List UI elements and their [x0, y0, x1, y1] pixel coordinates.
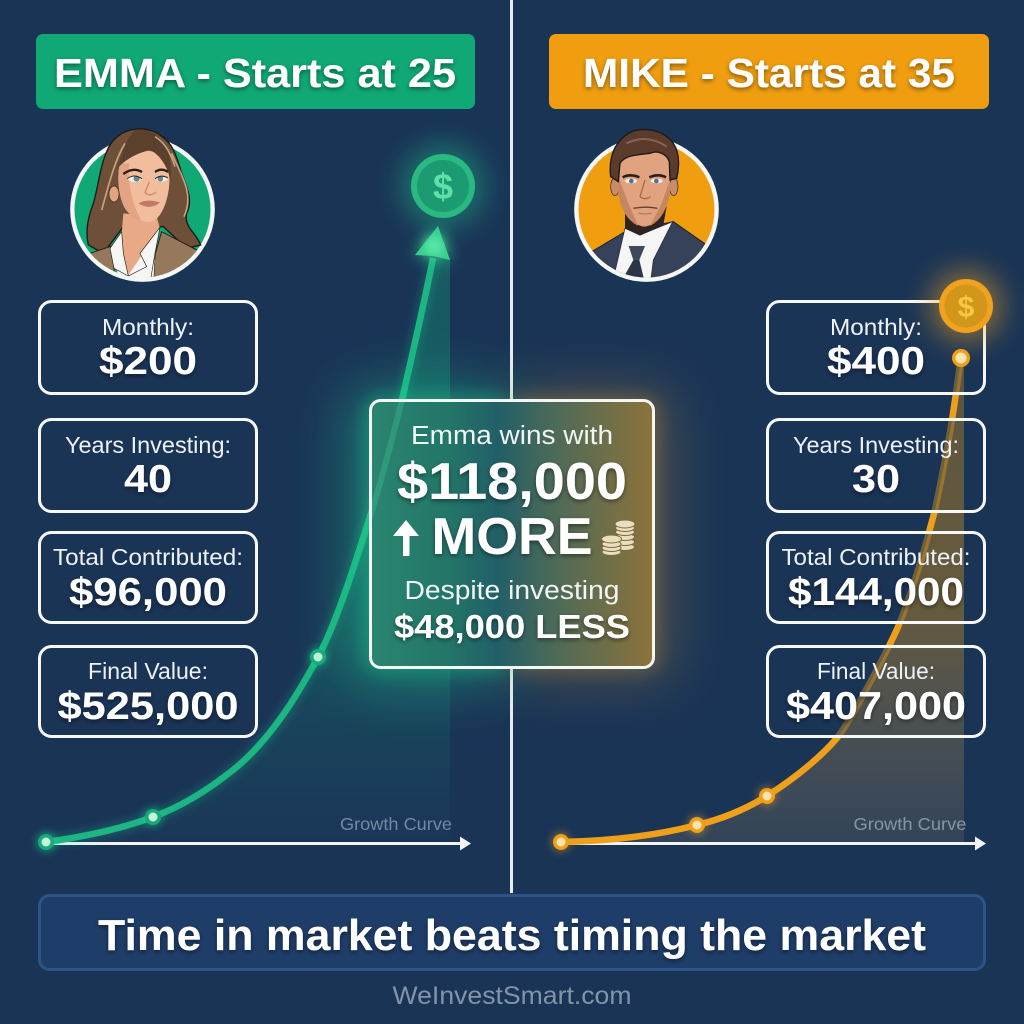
icon: Emma dollar coin	[401, 144, 485, 228]
stat: Mike monthly	[768, 302, 984, 394]
callout: Emma wins	[345, 385, 677, 685]
banner: takeaway: Time in market beats timing the market	[98, 911, 926, 960]
stat: Emma final value: $525,000	[58, 685, 238, 728]
stat: Emma years investing	[40, 420, 256, 512]
stat: Emma final value	[40, 646, 256, 736]
stat: Emma total contributed	[40, 532, 256, 622]
stat: Emma years investing: Years Investing:	[65, 432, 231, 458]
stat: Mike years investing	[768, 420, 984, 512]
callout: Emma wins: MORE	[432, 508, 592, 566]
header: Mike	[549, 34, 989, 109]
marker: Mike curve end point	[952, 349, 970, 367]
stat: Emma final value: Final Value:	[88, 658, 208, 684]
stat: Mike total contributed	[768, 532, 984, 622]
header: Mike: MIKE - Starts at 35	[583, 50, 955, 96]
stat: Mike final value: $407,000	[786, 685, 966, 728]
stat: Mike final value: Final Value:	[817, 658, 935, 684]
stat: Emma monthly: Monthly:	[102, 314, 194, 340]
chart: Emma growth curve	[36, 226, 471, 852]
center divider	[510, 0, 513, 893]
icon: Emma dollar coin: $	[433, 166, 453, 207]
stat: Mike years investing: 30	[852, 458, 900, 501]
stat: Mike total contributed: Total Contributed:	[782, 544, 970, 570]
chart: Emma growth curve: Growth Curve	[340, 814, 452, 834]
callout: Emma wins: $48,000 LESS	[394, 608, 630, 645]
portrait: Emma	[70, 129, 215, 287]
stat: Emma monthly: $200	[99, 340, 197, 383]
stat: Emma years investing: 40	[124, 458, 172, 501]
panels: Mike stats	[768, 302, 984, 736]
header: Emma: EMMA - Starts at 25	[54, 50, 456, 96]
stat: Mike years investing: Years Investing:	[793, 432, 959, 458]
icon: Mike dollar coin: $	[958, 291, 975, 324]
stat: Mike final value	[768, 646, 984, 736]
panels: Emma stats	[40, 302, 256, 736]
stat: Mike monthly: Monthly:	[830, 314, 922, 340]
callout: Emma wins: $118,000	[397, 453, 627, 511]
chart: Mike growth curve	[551, 358, 986, 852]
stat: Mike monthly: $400	[827, 340, 925, 383]
chart: Mike growth curve: Growth Curve	[854, 814, 966, 834]
stat: Emma total contributed: $96,000	[69, 571, 227, 614]
icon: coin stacks	[602, 520, 635, 556]
callout: Emma wins: Despite investing	[404, 577, 620, 605]
icon: Mike dollar coin	[930, 270, 1002, 342]
banner: takeaway	[40, 896, 984, 970]
footer: website: WeInvestSmart.com	[392, 982, 632, 1010]
icon: up arrow	[393, 520, 419, 556]
stat: Emma total contributed: Total Contributed:	[53, 544, 243, 570]
stat: Mike total contributed: $144,000	[788, 571, 964, 614]
header: Emma	[36, 34, 475, 109]
stat: Emma monthly	[40, 302, 256, 394]
callout: Emma wins: Emma wins with	[411, 422, 613, 450]
portrait: Mike	[574, 129, 719, 287]
